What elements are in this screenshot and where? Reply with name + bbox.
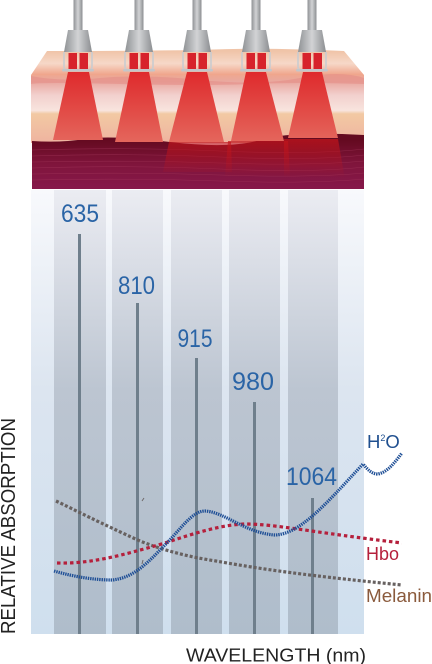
curve: H2O: [54, 453, 402, 580]
laser emitters: [62, 0, 328, 72]
curve: melanin: [56, 501, 402, 585]
label: Melanin: Melanin: [366, 585, 432, 606]
wavelength labels: 1064: [286, 463, 337, 491]
panel: skin cross-section: [31, 0, 364, 189]
wavelength bands: [54, 190, 338, 634]
wavelength labels: 635: [61, 200, 99, 228]
label: Hbo: Hbo: [366, 544, 399, 564]
label: H2O: O: [385, 431, 400, 452]
wavelength labels: 980: [232, 368, 274, 396]
curve: Hbo: [57, 524, 402, 563]
wavelength labels: 915: [178, 325, 212, 353]
stray marks: [142, 498, 144, 564]
light beams: [53, 72, 345, 180]
panel: absorption chart: [31, 190, 364, 634]
wavelength bars: [78, 234, 314, 634]
label: H2O: H: [367, 431, 380, 452]
wavelength labels: 810: [118, 272, 155, 300]
label: H2O: 2: [380, 433, 385, 443]
wavelength labels: [61, 200, 337, 491]
